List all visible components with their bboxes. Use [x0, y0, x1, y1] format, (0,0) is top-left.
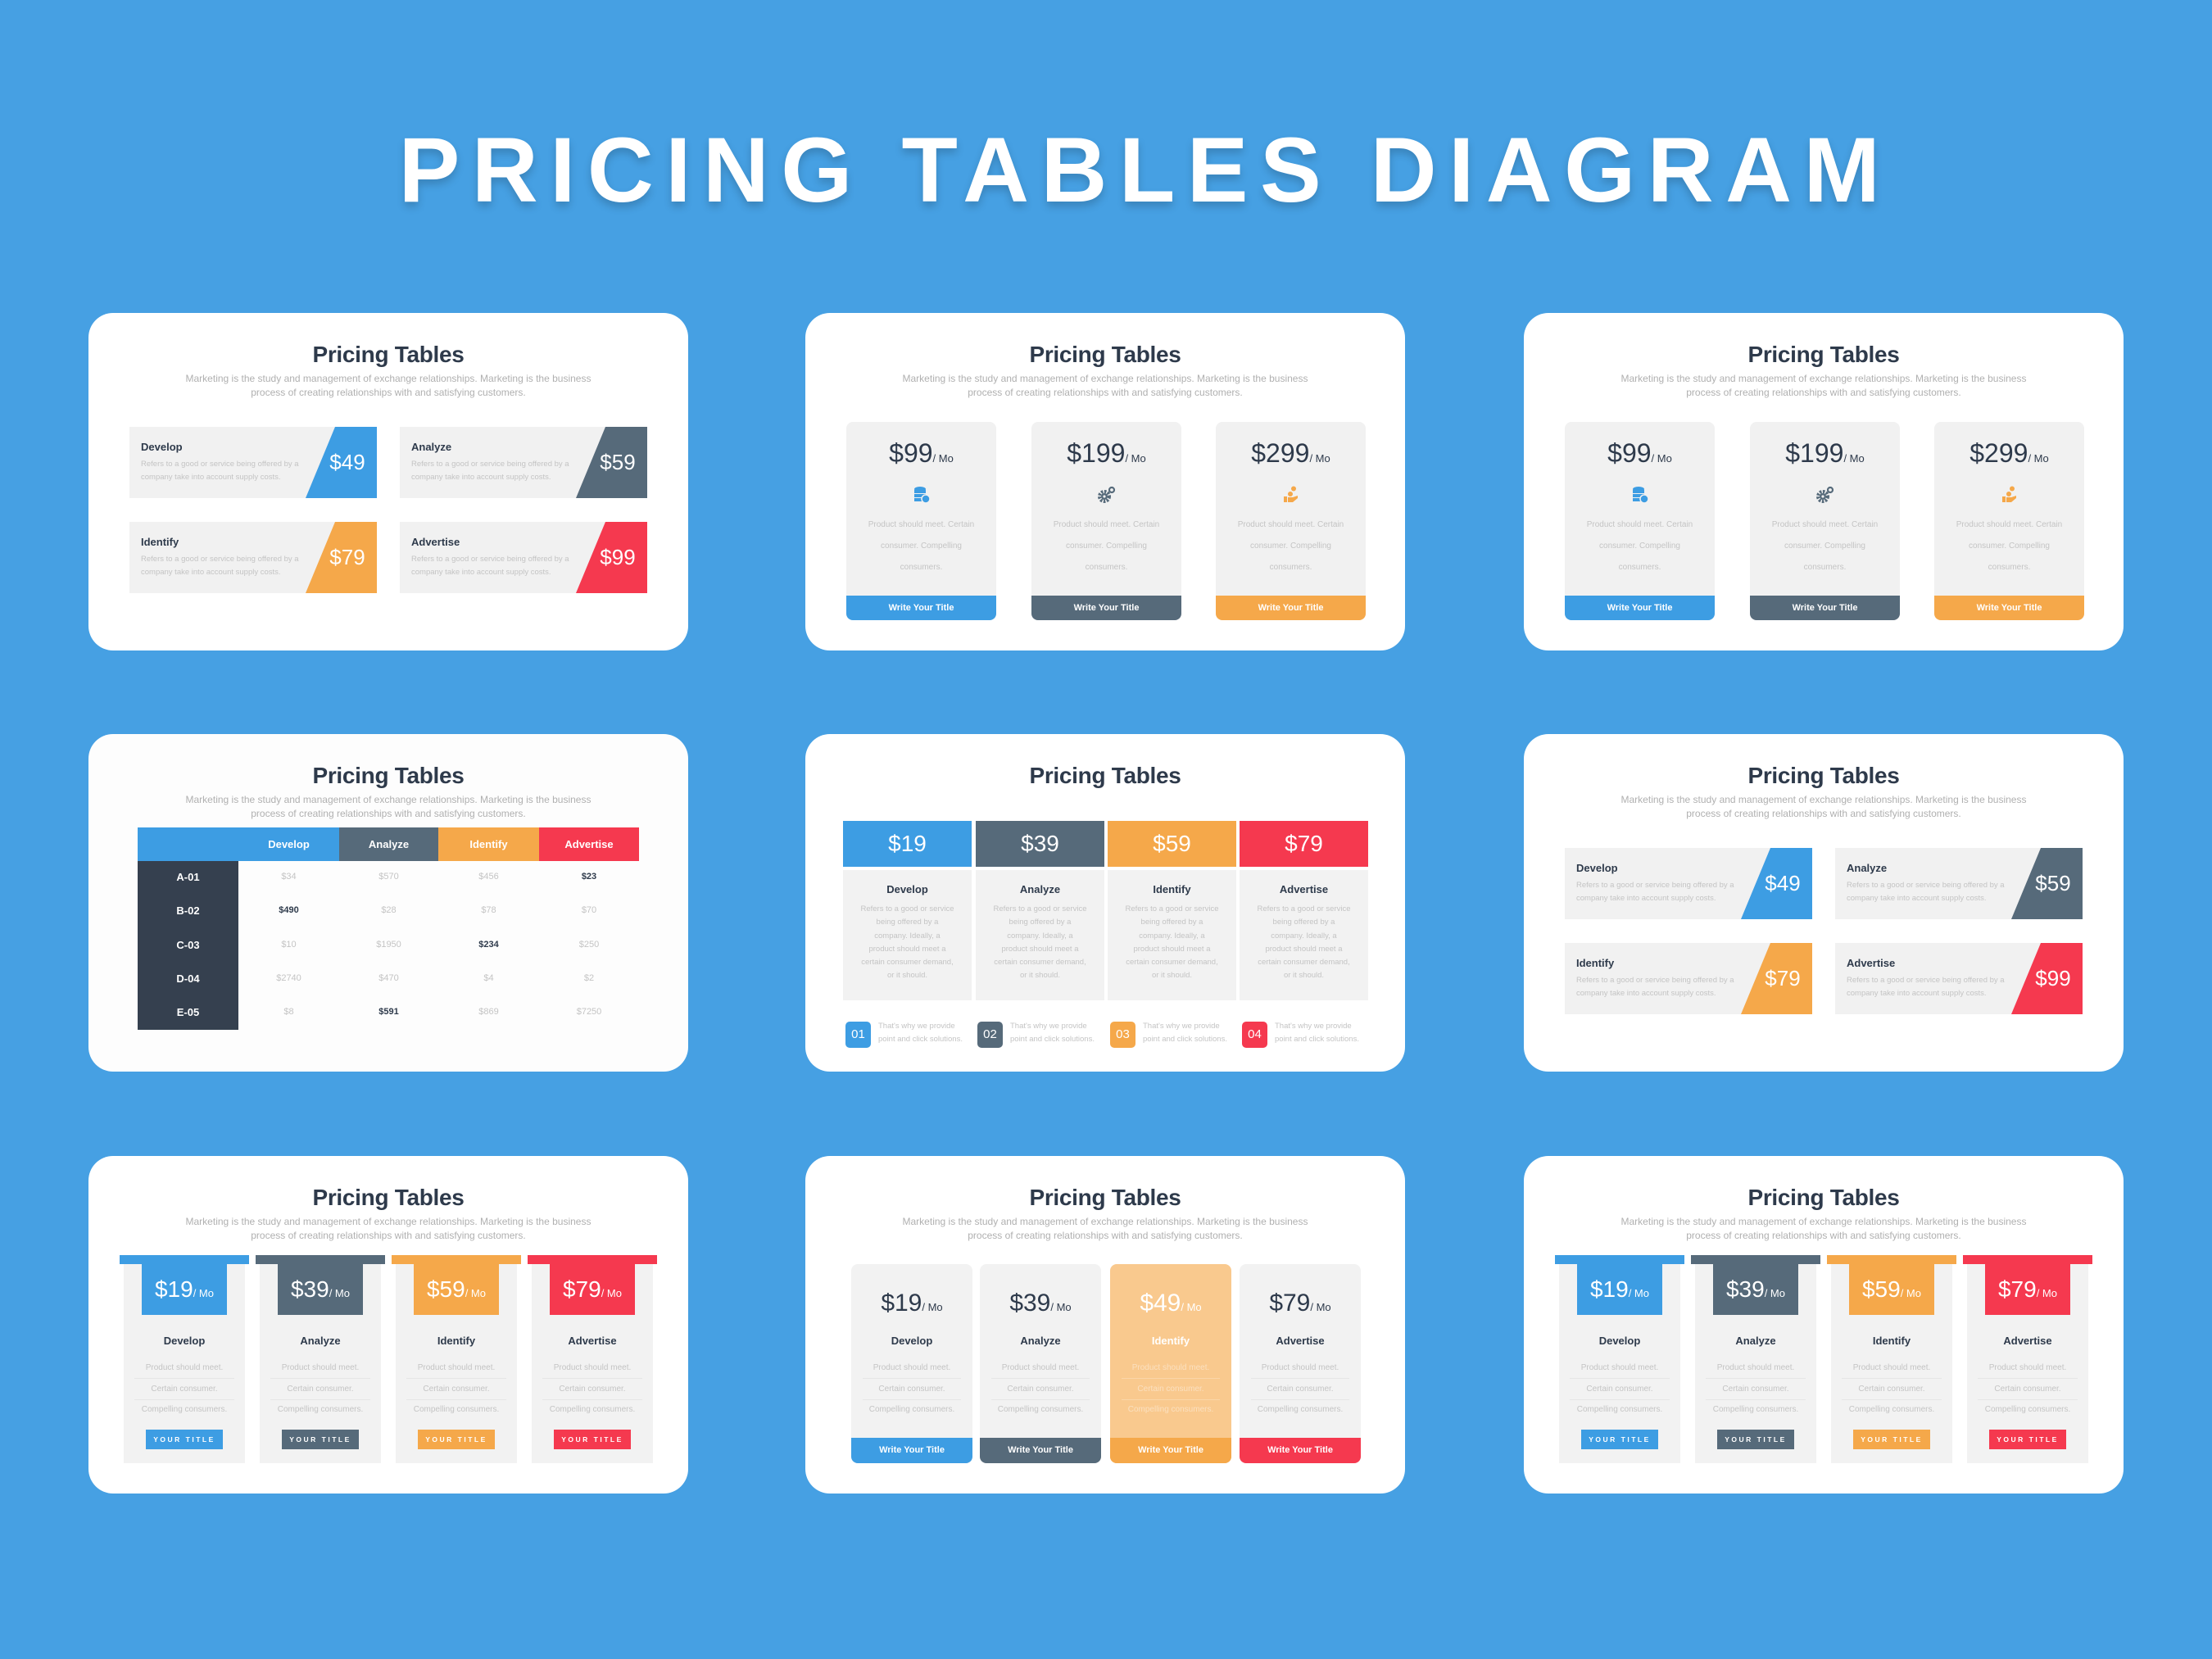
column identify: Product should meet.: [418, 1363, 495, 1372]
card analyze: Write Your Title: [1008, 1445, 1073, 1455]
plan card $199: Product should meet. Certain: [1772, 520, 1878, 529]
card identify highlighted: Write Your Title: [1138, 1445, 1203, 1455]
card develop: [851, 1264, 972, 1463]
column advertise: Advertise: [2003, 1335, 2052, 1347]
column develop: $19/ Mo: [1590, 1276, 1649, 1302]
card develop: Product should meet.: [873, 1363, 950, 1372]
column advertise: $79/ Mo: [563, 1276, 622, 1302]
subtitle text: Marketing is the study and management of exchange relationships. Marketing is the business: [186, 794, 591, 805]
card analyze: Certain consumer.: [1007, 1385, 1074, 1394]
card: identify $79: Refers to a good or service being offered by a company take into account supply costs.: [1576, 976, 1734, 998]
icon: database: [914, 487, 929, 503]
subtitle text: [903, 373, 1308, 398]
table values: $34: [281, 872, 297, 882]
body analyze: company. Ideally, a: [1007, 931, 1073, 941]
plan card $99: $99/ Mo: [889, 438, 954, 468]
column identify: YOUR TITLE: [1861, 1435, 1923, 1444]
card develop: Write Your Title: [879, 1445, 945, 1455]
badge text 04: That's why we provide point and click solutions.: [1275, 1022, 1359, 1044]
column identify: $59/ Mo: [1862, 1276, 1921, 1302]
column advertise: YOUR TITLE: [561, 1435, 623, 1444]
column identify: Certain consumer.: [1858, 1385, 1925, 1394]
body analyze: certain consumer demand,: [994, 958, 1086, 967]
price header $19: [843, 821, 972, 867]
subtitle text: Marketing is the study and management of exchange relationships. Marketing is the business: [903, 1216, 1308, 1227]
subtitle text: process of creating relationships with and satisfying customers.: [251, 1230, 526, 1241]
body analyze: Analyze: [1020, 883, 1060, 895]
subtitle text: process of creating relationships with and satisfying customers.: [1686, 387, 1961, 398]
card: analyze $59: Refers to a good or service being offered by a company take into account supply costs.: [411, 460, 569, 482]
body identify: Refers to a good or service: [1125, 904, 1219, 913]
table values: $570: [378, 872, 399, 882]
column develop: [1555, 1255, 1684, 1463]
table values: $2: [584, 973, 594, 983]
column identify: Identify: [437, 1335, 475, 1347]
badge 01: [845, 1022, 871, 1048]
subtitle text: Marketing is the study and management of exchange relationships. Marketing is the business: [903, 373, 1308, 384]
subtitle text: Marketing is the study and management of exchange relationships. Marketing is the business: [186, 373, 591, 384]
column develop: Develop: [164, 1335, 205, 1347]
body advertise: [1240, 870, 1368, 1000]
table values: $8: [283, 1007, 294, 1017]
card advertise: $79/ Mo: [1269, 1290, 1331, 1317]
subtitle text: process of creating relationships with and satisfying customers.: [968, 387, 1243, 398]
table values: $470: [378, 973, 399, 983]
column develop: Product should meet.: [146, 1363, 223, 1372]
column identify: [1827, 1255, 1956, 1463]
table header: [138, 827, 639, 861]
badge text 01: That's why we provide point and click solutions.: [878, 1022, 963, 1044]
column advertise: YOUR TITLE: [1997, 1435, 2059, 1444]
plan card $99: $99/ Mo: [1607, 438, 1672, 468]
price header $79: [1240, 821, 1368, 867]
body develop: product should meet a: [868, 945, 945, 954]
card: identify $79: Identify: [1576, 957, 1614, 969]
column develop: Certain consumer.: [1586, 1385, 1653, 1394]
panel heading: Pricing Tables: [312, 1185, 465, 1210]
column analyze: Certain consumer.: [1722, 1385, 1789, 1394]
column advertise: [528, 1255, 657, 1463]
plan card $299: consumers.: [1270, 563, 1312, 572]
body identify: being offered by a: [1141, 918, 1203, 927]
column develop: $19/ Mo: [155, 1276, 214, 1302]
icon: gears: [1098, 487, 1116, 503]
table values: $70: [582, 905, 596, 915]
plan card $199: Write Your Title: [1793, 603, 1857, 613]
table header: Develop: [268, 838, 310, 850]
panel: row2 col3 price cards: [1524, 734, 2124, 1072]
body analyze: being offered by a: [1009, 918, 1071, 927]
card: analyze $59: $59: [2035, 871, 2071, 895]
table values: $7250: [577, 1007, 601, 1017]
plan card $99: consumer. Compelling: [1599, 542, 1680, 551]
column analyze: [1691, 1255, 1820, 1463]
column identify: Identify: [1873, 1335, 1911, 1347]
title: PRICING TABLES DIAGRAM: [399, 119, 1892, 221]
column develop: Product should meet.: [1581, 1363, 1658, 1372]
panel: row3 col3 ribbon columns: [1524, 1156, 2124, 1494]
card identify highlighted: Certain consumer.: [1137, 1385, 1204, 1394]
column develop: Compelling consumers.: [1577, 1405, 1662, 1414]
badge 02: [977, 1022, 1003, 1048]
subtitle text: [186, 1216, 591, 1241]
plan card $99: consumers.: [900, 563, 942, 572]
card: develop $49: [1565, 848, 1812, 919]
card develop: Compelling consumers.: [869, 1405, 954, 1414]
plan card $99: Product should meet. Certain: [1587, 520, 1693, 529]
card: develop $49: Refers to a good or service being offered by a company take into account supply costs.: [141, 460, 299, 482]
panel heading: Pricing Tables: [1747, 1185, 1900, 1210]
plan card $99: consumer. Compelling: [881, 542, 962, 551]
column develop: Compelling consumers.: [142, 1405, 227, 1414]
body identify: certain consumer demand,: [1126, 958, 1218, 967]
plan card $199: Product should meet. Certain: [1054, 520, 1159, 529]
card: advertise $99: $99: [2035, 966, 2071, 990]
subtitle text: Marketing is the study and management of exchange relationships. Marketing is the business: [1621, 1216, 2026, 1227]
icon: hand with coins: [2002, 487, 2016, 502]
card advertise: [1240, 1264, 1361, 1463]
column develop: YOUR TITLE: [1589, 1435, 1651, 1444]
card: advertise $99: [1835, 943, 2083, 1014]
table values: $869: [478, 1007, 499, 1017]
card: advertise $99: Advertise: [411, 536, 460, 548]
plan card $199: consumer. Compelling: [1066, 542, 1147, 551]
card: analyze $59: Refers to a good or service being offered by a company take into account supply costs.: [1847, 881, 2005, 903]
row labels column: C-03: [176, 939, 200, 951]
plan card $99: consumers.: [1619, 563, 1661, 572]
column identify: [392, 1255, 521, 1463]
badge 04: 04: [1248, 1027, 1262, 1041]
column analyze: Analyze: [300, 1335, 341, 1347]
card analyze: Analyze: [1020, 1335, 1061, 1347]
plan card $199: consumers.: [1086, 563, 1127, 572]
column develop: YOUR TITLE: [153, 1435, 215, 1444]
card: advertise $99: Refers to a good or service being offered by a company take into account supply costs.: [411, 555, 569, 577]
body advertise: product should meet a: [1265, 945, 1342, 954]
subtitle text: process of creating relationships with and satisfying customers.: [251, 808, 526, 819]
card advertise: Compelling consumers.: [1258, 1405, 1343, 1414]
column advertise: Certain consumer.: [559, 1385, 626, 1394]
price header $39: [976, 821, 1104, 867]
subtitle text: [186, 373, 591, 398]
card: analyze $59: Analyze: [411, 441, 451, 453]
card analyze: Product should meet.: [1002, 1363, 1079, 1372]
column identify: Certain consumer.: [423, 1385, 490, 1394]
table values: $28: [381, 905, 397, 915]
plan card $199: consumer. Compelling: [1784, 542, 1865, 551]
body analyze: Refers to a good or service: [993, 904, 1087, 913]
body identify: Identify: [1153, 883, 1191, 895]
column advertise: $79/ Mo: [1998, 1276, 2057, 1302]
column advertise: Product should meet.: [1989, 1363, 2066, 1372]
table header: Advertise: [564, 838, 614, 850]
card analyze: $39/ Mo: [1009, 1290, 1072, 1317]
card: advertise $99: Refers to a good or service being offered by a company take into account supply costs.: [1847, 976, 2005, 998]
plan card $299: $299/ Mo: [1251, 438, 1330, 468]
body advertise: Refers to a good or service: [1257, 904, 1351, 913]
panel heading: Pricing Tables: [1029, 763, 1181, 788]
panel: row1 col3 three plans: [1524, 313, 2124, 650]
body develop: company. Ideally, a: [874, 931, 941, 941]
table values: $78: [481, 905, 496, 915]
table header: Identify: [469, 838, 508, 850]
card: analyze $59: $59: [600, 450, 636, 474]
body identify: or it should.: [1152, 971, 1192, 980]
panel heading: Pricing Tables: [1029, 1185, 1181, 1210]
badge text 02: That's why we provide point and click solutions.: [1010, 1022, 1095, 1044]
subtitle text: [1621, 794, 2026, 819]
plan card $99: [1565, 422, 1715, 620]
card develop: Certain consumer.: [878, 1385, 945, 1394]
price header $59: [1108, 821, 1236, 867]
plan card $99: Write Your Title: [889, 603, 954, 613]
row labels column: [138, 861, 238, 1030]
body identify: company. Ideally, a: [1139, 931, 1205, 941]
column identify: Compelling consumers.: [1849, 1405, 1934, 1414]
body advertise: or it should.: [1284, 971, 1324, 980]
card advertise: Advertise: [1276, 1335, 1325, 1347]
column advertise: Certain consumer.: [1994, 1385, 2061, 1394]
column analyze: YOUR TITLE: [1725, 1435, 1787, 1444]
subtitle text: Marketing is the study and management of exchange relationships. Marketing is the business: [186, 1216, 591, 1227]
column analyze: Compelling consumers.: [278, 1405, 363, 1414]
body develop: Develop: [886, 883, 928, 895]
column identify: YOUR TITLE: [425, 1435, 487, 1444]
row labels column: A-01: [176, 871, 200, 883]
panel heading: Pricing Tables: [312, 763, 465, 788]
table values: $234: [478, 940, 499, 950]
column analyze: Analyze: [1735, 1335, 1776, 1347]
card develop: Develop: [891, 1335, 932, 1347]
panel heading: Pricing Tables: [1029, 342, 1181, 367]
icon: gears: [1816, 487, 1834, 503]
body identify: product should meet a: [1133, 945, 1211, 954]
subtitle text: process of creating relationships with and satisfying customers.: [251, 387, 526, 398]
panel heading: Pricing Tables: [312, 342, 465, 367]
body identify: [1108, 870, 1236, 1000]
body advertise: company. Ideally, a: [1271, 931, 1337, 941]
panel heading: Pricing Tables: [1747, 342, 1900, 367]
column develop: [120, 1255, 249, 1463]
badge text 03: That's why we provide point and click solutions.: [1143, 1022, 1227, 1044]
row labels column: D-04: [176, 972, 200, 985]
card: identify $79: $79: [329, 545, 365, 569]
body develop: or it should.: [887, 971, 927, 980]
card: develop $49: Develop: [1576, 862, 1618, 874]
price header $19: $19: [888, 831, 927, 856]
panel: row3 col1 ribbon columns: [88, 1156, 688, 1494]
plan card $299: $299/ Mo: [1969, 438, 2049, 468]
badge 04: [1242, 1022, 1267, 1048]
card analyze: [980, 1264, 1101, 1463]
body advertise: being offered by a: [1273, 918, 1335, 927]
plan card $199: $199/ Mo: [1067, 438, 1146, 468]
price header $59: $59: [1153, 831, 1191, 856]
badge 03: 03: [1116, 1027, 1130, 1041]
badge 01: 01: [851, 1027, 865, 1041]
subtitle text: process of creating relationships with and satisfying customers.: [968, 1230, 1243, 1241]
column analyze: Compelling consumers.: [1713, 1405, 1798, 1414]
card develop: $19/ Mo: [881, 1290, 943, 1317]
subtitle text: [186, 794, 591, 819]
card advertise: Product should meet.: [1262, 1363, 1339, 1372]
table values: $4: [483, 973, 494, 983]
card: identify $79: $79: [1765, 966, 1801, 990]
card identify highlighted: Identify: [1152, 1335, 1190, 1347]
icon: hand with coins: [1284, 487, 1298, 502]
icon: database: [1633, 487, 1648, 503]
subtitle text: [903, 1216, 1308, 1241]
column develop: Certain consumer.: [151, 1385, 218, 1394]
plan card $99: Product should meet. Certain: [868, 520, 974, 529]
body analyze: or it should.: [1020, 971, 1060, 980]
card: develop $49: $49: [329, 450, 365, 474]
column advertise: Compelling consumers.: [1985, 1405, 2070, 1414]
table values: $250: [579, 940, 599, 950]
badge 02: 02: [983, 1027, 997, 1041]
plan card $299: Write Your Title: [1977, 603, 2042, 613]
card: develop $49: [129, 427, 377, 498]
body develop: being offered by a: [877, 918, 938, 927]
card advertise: Write Your Title: [1267, 1445, 1333, 1455]
subtitle text: process of creating relationships with and satisfying customers.: [1686, 808, 1961, 819]
row labels column: B-02: [176, 904, 200, 917]
body advertise: Advertise: [1280, 883, 1328, 895]
subtitle text: Marketing is the study and management of exchange relationships. Marketing is the business: [1621, 794, 2026, 805]
column identify: Product should meet.: [1853, 1363, 1930, 1372]
column analyze: $39/ Mo: [1726, 1276, 1785, 1302]
card: develop $49: Refers to a good or service being offered by a company take into account supply costs.: [1576, 881, 1734, 903]
price header $79: $79: [1285, 831, 1323, 856]
price header $39: $39: [1021, 831, 1059, 856]
plan card $99: [846, 422, 996, 620]
table values: $490: [279, 905, 299, 915]
panel heading: Pricing Tables: [1747, 763, 1900, 788]
subtitle text: Marketing is the study and management of exchange relationships. Marketing is the business: [1621, 373, 2026, 384]
table values: $2740: [276, 973, 301, 983]
subtitle text: [1621, 1216, 2026, 1241]
column identify: Compelling consumers.: [414, 1405, 499, 1414]
subtitle text: [1621, 373, 2026, 398]
column analyze: $39/ Mo: [291, 1276, 350, 1302]
body develop: Refers to a good or service: [860, 904, 954, 913]
card: identify $79: Refers to a good or service being offered by a company take into account supply costs.: [141, 555, 299, 577]
column analyze: YOUR TITLE: [289, 1435, 351, 1444]
plan card $299: consumer. Compelling: [1250, 542, 1331, 551]
plan card $299: Write Your Title: [1258, 603, 1323, 613]
body develop: certain consumer demand,: [861, 958, 954, 967]
card identify highlighted: Product should meet.: [1132, 1363, 1209, 1372]
card analyze: Compelling consumers.: [998, 1405, 1083, 1414]
card advertise: Certain consumer.: [1267, 1385, 1334, 1394]
card: identify $79: [1565, 943, 1812, 1014]
card: develop $49: Develop: [141, 441, 183, 453]
card identify highlighted: Compelling consumers.: [1128, 1405, 1213, 1414]
body analyze: [976, 870, 1104, 1000]
plan card $199: Write Your Title: [1074, 603, 1139, 613]
plan card $199: consumers.: [1804, 563, 1846, 572]
card: advertise $99: $99: [600, 545, 636, 569]
table values: $23: [582, 872, 596, 882]
body advertise: certain consumer demand,: [1258, 958, 1350, 967]
plan card $299: Product should meet. Certain: [1238, 520, 1344, 529]
plan card $299: consumers.: [1988, 563, 2030, 572]
plan card $99: Write Your Title: [1607, 603, 1672, 613]
panel: row1 col2 three plans: [805, 313, 1405, 650]
panel: row1 col1 price cards: [88, 313, 688, 650]
panel: row2 col1 data table: [88, 734, 688, 1072]
table values: $591: [378, 1007, 399, 1017]
column analyze: Certain consumer.: [287, 1385, 354, 1394]
column analyze: Product should meet.: [282, 1363, 359, 1372]
badge 03: [1110, 1022, 1135, 1048]
table values: $456: [478, 872, 499, 882]
subtitle text: process of creating relationships with and satisfying customers.: [1686, 1230, 1961, 1241]
table values: $1950: [376, 940, 401, 950]
column develop: Develop: [1599, 1335, 1640, 1347]
card identify highlighted: $49/ Mo: [1140, 1290, 1202, 1317]
plan card $299: [1934, 422, 2084, 620]
table values: $10: [281, 940, 297, 950]
plan card $199: [1750, 422, 1900, 620]
table values: [276, 872, 601, 1017]
card: develop $49: $49: [1765, 871, 1801, 895]
plan card $299: [1216, 422, 1366, 620]
table header: Analyze: [369, 838, 409, 850]
column analyze: [256, 1255, 385, 1463]
column advertise: [1963, 1255, 2092, 1463]
card: advertise $99: [400, 522, 647, 593]
column advertise: Advertise: [568, 1335, 617, 1347]
panel: row3 col2 rounded plan cards: [805, 1156, 1405, 1494]
column analyze: Product should meet.: [1717, 1363, 1794, 1372]
plan card $299: Product should meet. Certain: [1956, 520, 2062, 529]
card: analyze $59: [400, 427, 647, 498]
plan card $299: consumer. Compelling: [1969, 542, 2050, 551]
column identify: $59/ Mo: [427, 1276, 486, 1302]
card: analyze $59: Analyze: [1847, 862, 1887, 874]
card: identify $79: [129, 522, 377, 593]
row labels column: E-05: [177, 1006, 199, 1018]
plan card $199: [1031, 422, 1181, 620]
table: [138, 827, 639, 1030]
card: identify $79: Identify: [141, 536, 179, 548]
card: analyze $59: [1835, 848, 2083, 919]
card identify highlighted: [1110, 1264, 1231, 1463]
body develop: [843, 870, 972, 1000]
panel: row2 col2 four columns with badges: [805, 734, 1405, 1072]
card: advertise $99: Advertise: [1847, 957, 1895, 969]
column advertise: Product should meet.: [554, 1363, 631, 1372]
body analyze: product should meet a: [1001, 945, 1078, 954]
plan card $199: $199/ Mo: [1785, 438, 1865, 468]
column advertise: Compelling consumers.: [550, 1405, 635, 1414]
